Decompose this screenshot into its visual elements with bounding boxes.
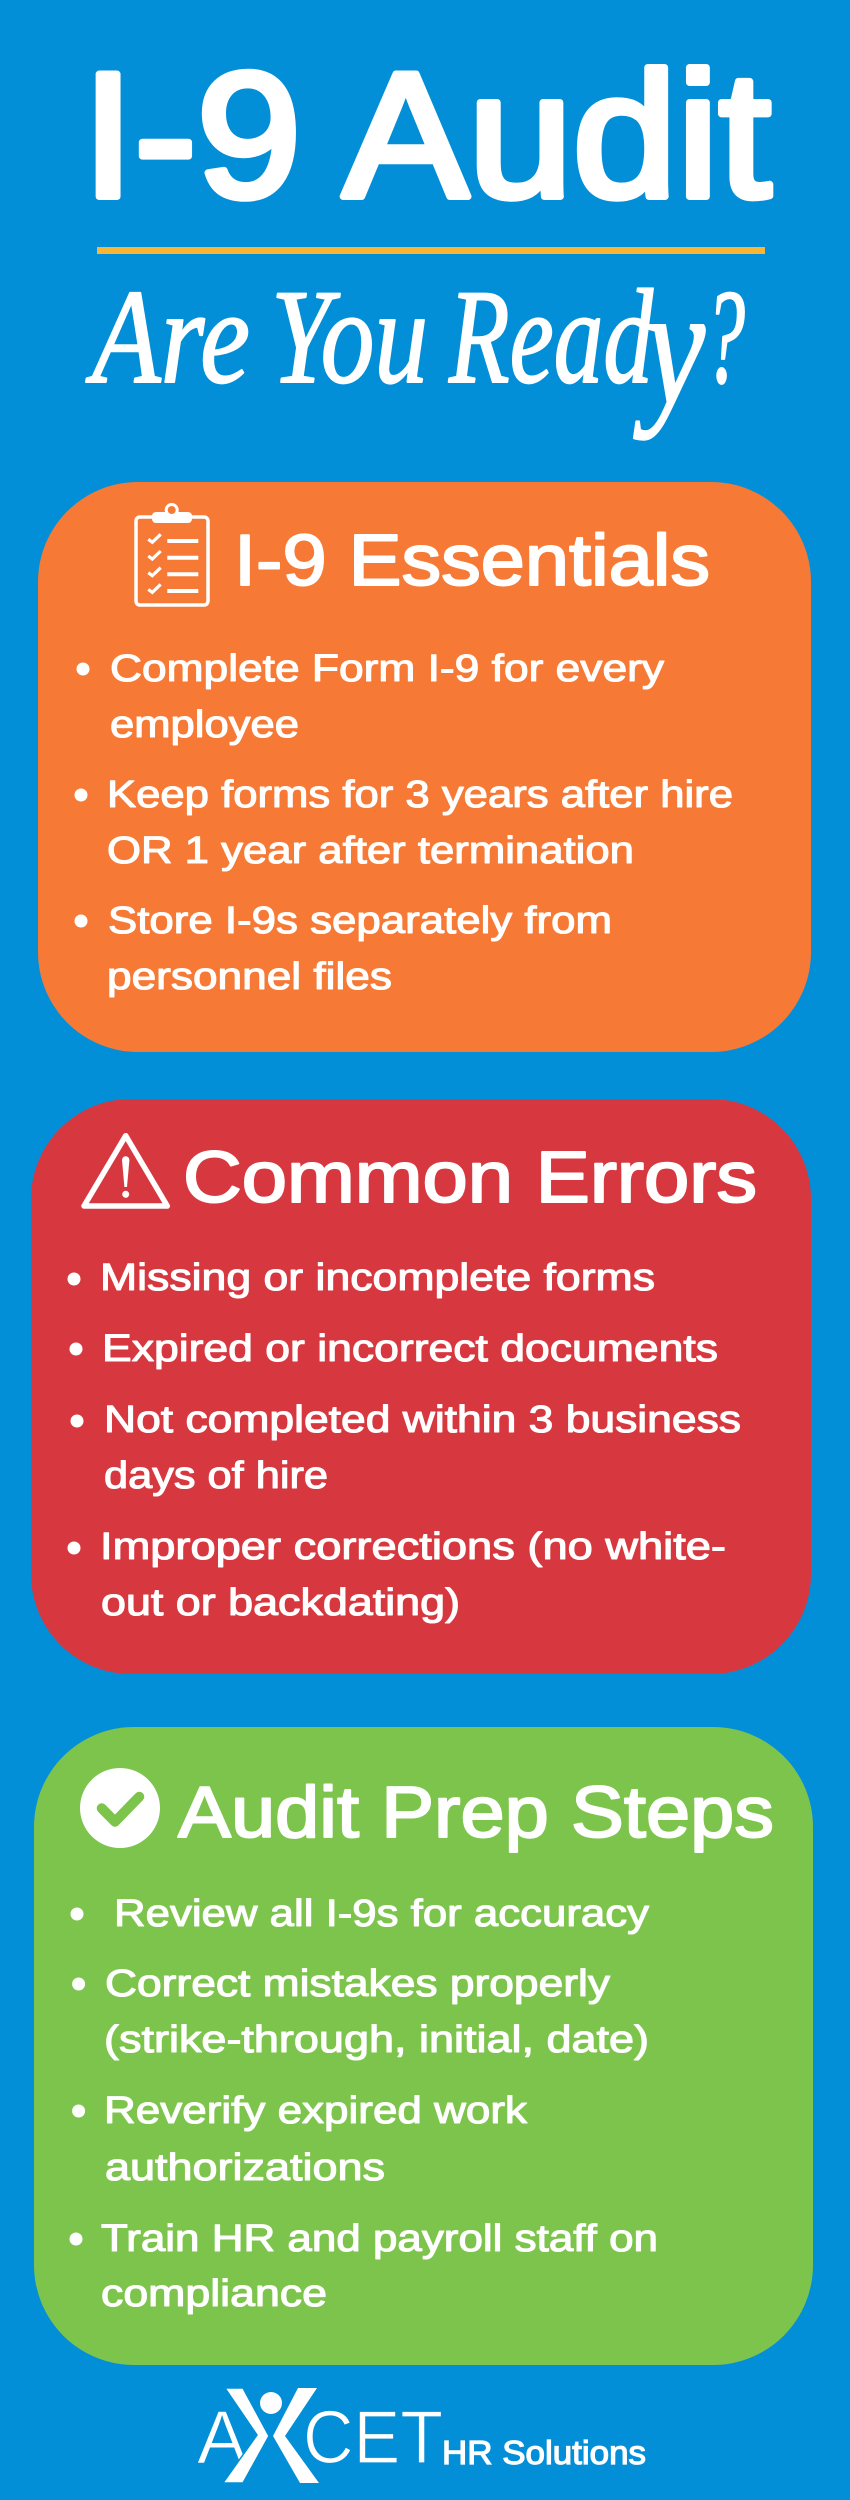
bullet list: employee: [110, 704, 299, 746]
subtitle: [85, 252, 745, 440]
panel: Common Errors: [31, 1099, 811, 1674]
icon: check circle: [80, 1768, 160, 1848]
bullet list: Expired or incorrect documents: [102, 1328, 718, 1370]
bullet list: Missing or incomplete forms: [100, 1257, 655, 1299]
title: I-9 Audit: [82, 36, 771, 234]
bullet list: days of hire: [104, 1455, 328, 1497]
heading: I-9 Essentials: [234, 521, 710, 601]
subtitle: Read: [448, 263, 653, 412]
bullet list: authorizations: [105, 2147, 385, 2189]
bullet list: Correct mistakes properly: [105, 1963, 610, 2005]
bullet list: Reverify expired work: [104, 2090, 528, 2132]
panel: Audit Prep Steps: [34, 1727, 813, 2365]
bullet list: Complete Form I-9 for every: [110, 648, 664, 690]
logo: AXCET HR Solutions: CET: [303, 2395, 443, 2479]
bullet list: compliance: [101, 2273, 327, 2315]
bullet list: personnel files: [107, 956, 392, 998]
bullet list: [70, 1893, 658, 2315]
bullet list: [74, 648, 733, 998]
logo: AXCET HR Solutions: A: [197, 2395, 247, 2479]
bullet list: Review all I-9s for accuracy: [114, 1893, 649, 1935]
subtitle: You: [271, 263, 428, 412]
icon: warning triangle: [84, 1136, 167, 1206]
bullet list: Keep forms for 3 years after hire: [107, 774, 733, 816]
logo: AXCET HR Solutions: HR Solutions: [442, 2434, 646, 2471]
subtitle: ?: [705, 263, 745, 412]
bullet list: (strike-through, initial, date): [104, 2019, 649, 2061]
bullet list: OR 1 year after termination: [107, 830, 634, 872]
bullet list: Improper corrections (no white-: [100, 1526, 726, 1568]
logo: AXCET HR Solutions: [197, 2388, 646, 2483]
icon: clipboard checklist: [136, 504, 208, 605]
subtitle: Are: [85, 263, 250, 412]
bullet list: [68, 1257, 741, 1624]
bullet list: Not completed within 3 business: [104, 1399, 741, 1441]
panel: I-9 Essentials: [38, 482, 811, 1052]
subtitle: y: [633, 252, 705, 440]
accent rule: [97, 247, 765, 254]
heading: Common Errors: [183, 1138, 757, 1218]
bullet list: Train HR and payroll staff on: [101, 2218, 658, 2260]
bullet list: out or backdating): [101, 1582, 460, 1624]
bullet list: Store I-9s separately from: [108, 900, 612, 942]
heading: Audit Prep Steps: [178, 1773, 774, 1853]
